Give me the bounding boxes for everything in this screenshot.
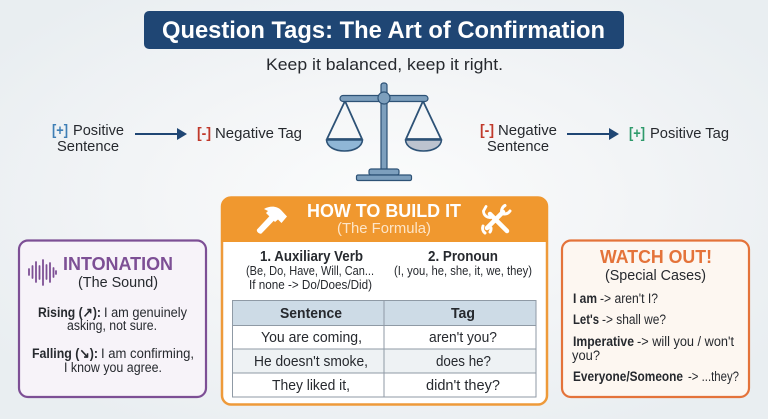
column: auxiliary verb: If none -> Do/Does/Did) (249, 278, 372, 292)
case: imperative: Imperative (573, 334, 634, 349)
heading: watch out: WATCH OUT! (600, 246, 712, 267)
flow: negative sentence to positive tag: Sentence (487, 138, 549, 155)
text: rising: Rising (↗): (38, 305, 101, 320)
flow: negative sentence to positive tag: [-] (480, 122, 494, 139)
icon: balance scale (326, 83, 442, 180)
text: falling: Falling (↘): (32, 346, 98, 361)
case: imperative: you? (572, 348, 600, 363)
case: everyone/someone: Everyone/Someone (573, 369, 683, 384)
table: examples: Tag (451, 306, 475, 322)
subheading: special cases: (Special Cases) (605, 267, 706, 284)
flow: negative sentence to positive tag: [+] (629, 125, 645, 142)
title: Question Tags: The Art of Confirmation (162, 17, 605, 44)
icon: wrench and screwdriver (483, 206, 510, 233)
flow: positive sentence to negative tag (52, 122, 302, 155)
table: examples: Sentence (280, 306, 342, 322)
panel: watch out (562, 240, 749, 397)
table: examples: didn't they? (426, 378, 500, 394)
column: auxiliary verb: 1. Auxiliary Verb (260, 249, 363, 265)
case: everyone/someone: -> ...they? (688, 369, 739, 384)
table: examples (232, 300, 536, 397)
flow: negative sentence to positive tag: Positive Tag (650, 125, 729, 142)
flow: positive sentence to negative tag: Negative Tag (215, 125, 302, 142)
column: pronoun: (I, you, he, she, it, we, they) (394, 264, 532, 278)
case: let's: Let's (573, 312, 599, 327)
case: imperative (572, 334, 734, 363)
text: falling (32, 346, 194, 375)
table: examples: You are coming, (261, 330, 362, 346)
case: imperative: -> will you / won't (637, 334, 734, 349)
case: i am (573, 291, 658, 306)
table: examples: He doesn't smoke, (254, 354, 368, 370)
flow: negative sentence to positive tag (480, 122, 729, 155)
icon: sound wave (29, 260, 56, 285)
column: auxiliary verb: (Be, Do, Have, Will, Can... (246, 264, 374, 278)
subtitle: Keep it balanced, keep it right. (266, 55, 503, 74)
table: examples: does he? (436, 354, 491, 370)
table: examples: They liked it, (272, 378, 350, 394)
icon: hammer (257, 207, 287, 234)
flow: positive sentence to negative tag: Positive (73, 122, 124, 139)
case: let's: -> shall we? (602, 312, 666, 327)
text: rising (38, 305, 187, 333)
text: rising: asking, not sure. (67, 318, 157, 333)
flow: positive sentence to negative tag: Sentence (57, 138, 119, 155)
text: falling: I am confirming, (101, 346, 194, 361)
flow: positive sentence to negative tag: [-] (197, 125, 211, 142)
table: examples: aren't you? (429, 330, 497, 346)
column: pronoun (394, 249, 532, 278)
column: auxiliary verb (246, 249, 374, 292)
subheading: the formula: (The Formula) (337, 220, 431, 237)
case: let's (573, 312, 666, 327)
case: i am: I am (573, 291, 597, 306)
panel: how to build it (222, 198, 547, 404)
case: i am: -> aren't I? (600, 291, 658, 306)
text: falling: I know you agree. (64, 360, 162, 375)
heading: intonation: INTONATION (63, 254, 173, 274)
heading: how to build it: HOW TO BUILD IT (307, 201, 461, 221)
flow: negative sentence to positive tag: Negative (498, 122, 557, 139)
flow: positive sentence to negative tag: [+] (52, 122, 68, 139)
panel: intonation (19, 240, 206, 397)
text: rising: I am genuinely (104, 305, 187, 320)
title (144, 11, 624, 49)
subheading: the sound: (The Sound) (78, 274, 158, 291)
column: pronoun: 2. Pronoun (428, 249, 498, 265)
